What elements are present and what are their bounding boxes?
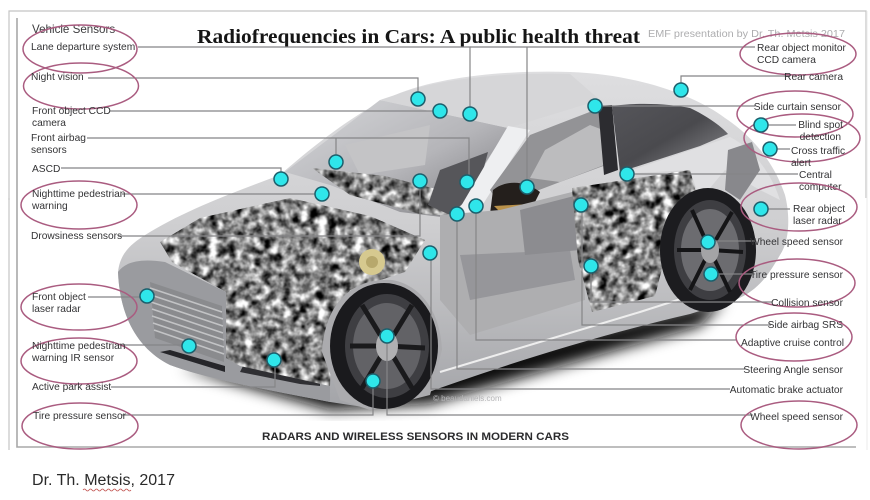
callout: front object laser radar: laser radar xyxy=(32,304,81,315)
front side window xyxy=(490,108,606,205)
callout: adaptive cruise control xyxy=(469,199,852,361)
callout: steering angle sensor xyxy=(450,207,844,376)
callout: nighttime pedestrian warning: Nighttime pedestrian xyxy=(32,189,125,200)
presentation credit: EMF presentation by Dr. Th. Metsis 2017 xyxy=(648,29,845,40)
callout: front airbag sensors xyxy=(31,133,474,189)
callout: front object laser radar xyxy=(21,284,154,330)
car illustration xyxy=(118,72,788,410)
callout: collision sensor xyxy=(584,259,844,309)
callout: wheel speed sensor, rear: Wheel speed sensor xyxy=(750,237,844,248)
B pillar xyxy=(598,105,618,175)
callout: tire pressure sensor, front xyxy=(22,374,380,449)
callout: steering angle sensor: Steering Angle sensor xyxy=(743,365,844,376)
far door panel xyxy=(345,125,430,175)
callout: wheel speed sensor, front xyxy=(380,329,857,449)
callout: front object CCD camera: Front object CCD xyxy=(32,106,111,117)
callout: blind spot detection: Blind spot xyxy=(798,120,843,131)
callout: front airbag sensors: sensors xyxy=(31,145,67,156)
title: Radiofrequencies in Cars: A public health threat xyxy=(197,26,640,48)
callout: cross traffic alert xyxy=(763,142,845,169)
callout: drowsiness sensors xyxy=(31,174,427,242)
rear wheel xyxy=(660,188,756,312)
steering wheel and seat xyxy=(428,152,488,215)
callout: front airbag sensors: Front airbag xyxy=(31,133,86,144)
callout: central computer: computer xyxy=(799,182,842,193)
callout: blind spot detection: detection xyxy=(800,132,841,143)
callout: rear object monitor CCD camera: CCD camera xyxy=(757,55,816,66)
callout: cross traffic alert: alert xyxy=(791,158,811,169)
car body xyxy=(118,72,788,408)
callout: nighttime pedestrian warning IR sensor: Nighttime pedestrian xyxy=(32,341,125,352)
callout: tire pressure sensor, rear xyxy=(704,259,855,307)
callout: rear object monitor CCD camera xyxy=(470,33,856,194)
car ground shadow xyxy=(180,300,725,410)
callout: collision sensor: Collision sensor xyxy=(771,298,844,309)
callout: blind spot detection xyxy=(744,114,860,162)
rear quarter panel xyxy=(620,137,780,200)
callout: side curtain sensor xyxy=(588,91,853,137)
callout: wheel speed sensor, rear xyxy=(701,235,844,249)
engine bay xyxy=(160,198,425,386)
callout: ASCD: ASCD xyxy=(32,164,60,175)
callout: rear object laser radar: laser radar xyxy=(793,216,842,227)
front seat cutaway xyxy=(440,192,585,334)
callout: front object CCD camera: camera xyxy=(32,118,66,129)
callout: cross traffic alert: Cross traffic xyxy=(791,146,845,157)
callout: tire pressure sensor, front: Tire pressure sensor xyxy=(33,411,127,422)
callout: automatic brake actuator xyxy=(423,246,844,396)
callout: front object laser radar: Front object xyxy=(32,292,86,303)
image credit: © beaudaniels.com xyxy=(433,394,502,403)
callout: nighttime pedestrian warning xyxy=(21,181,329,229)
callout: side airbag SRS xyxy=(574,198,843,331)
callout: nighttime pedestrian warning: warning xyxy=(31,201,68,212)
callout: active park assist: Active park assist xyxy=(32,382,111,393)
A pillar xyxy=(454,126,530,218)
callout: rear object laser radar: Rear object xyxy=(793,204,845,215)
callout: tire pressure sensor, rear: Tire pressure sensor xyxy=(750,270,844,281)
callout: automatic brake actuator: Automatic brake actuator xyxy=(730,385,844,396)
callout: night vision: Night vision xyxy=(31,72,84,83)
callout: adaptive cruise control: Adaptive cruise control xyxy=(741,338,844,349)
callout: rear object monitor CCD camera: Rear object monitor xyxy=(757,43,847,54)
callout: active park assist xyxy=(32,353,281,393)
author credit: Dr. Th. Metsis, 2017 xyxy=(32,472,175,489)
rear seats through window xyxy=(530,125,604,182)
callout: central computer xyxy=(620,167,842,193)
callout: central computer: Central xyxy=(799,170,832,181)
callout: ASCD xyxy=(32,164,288,186)
roof highlight xyxy=(380,74,600,128)
windshield and door interior xyxy=(285,100,508,218)
callout: drowsiness sensors: Drowsiness sensors xyxy=(31,231,122,242)
door sill highlight xyxy=(440,296,690,372)
callout: wheel speed sensor, front: Wheel speed sensor xyxy=(750,412,844,423)
door mirror xyxy=(490,183,540,214)
front bumper xyxy=(118,260,330,402)
callout: rear camera: Rear camera xyxy=(784,72,843,83)
callout: side curtain sensor: Side curtain sensor xyxy=(754,102,842,113)
caption: RADARS AND WIRELESS SENSORS IN MODERN CARS xyxy=(262,431,569,443)
callout: front object CCD camera xyxy=(32,104,447,129)
radiator grille xyxy=(150,282,320,386)
callout: side airbag SRS: Side airbag SRS xyxy=(768,320,843,331)
callout: lane departure system xyxy=(23,25,477,121)
callout: night vision xyxy=(24,63,425,109)
callout: nighttime pedestrian warning IR sensor xyxy=(21,338,196,384)
callout: nighttime pedestrian warning IR sensor: warning IR sensor xyxy=(31,353,115,364)
dashboard xyxy=(314,168,448,215)
callout: lane departure system: Lane departure system xyxy=(31,42,135,53)
callout: rear camera xyxy=(674,72,843,97)
front wheel xyxy=(322,280,442,410)
heading: vehicle sensors: Vehicle Sensors xyxy=(32,23,115,36)
rear mechanism cutaway xyxy=(572,170,696,312)
rear light mechanism xyxy=(725,142,760,200)
callout: rear object laser radar xyxy=(741,183,857,231)
rear side window xyxy=(612,104,728,172)
